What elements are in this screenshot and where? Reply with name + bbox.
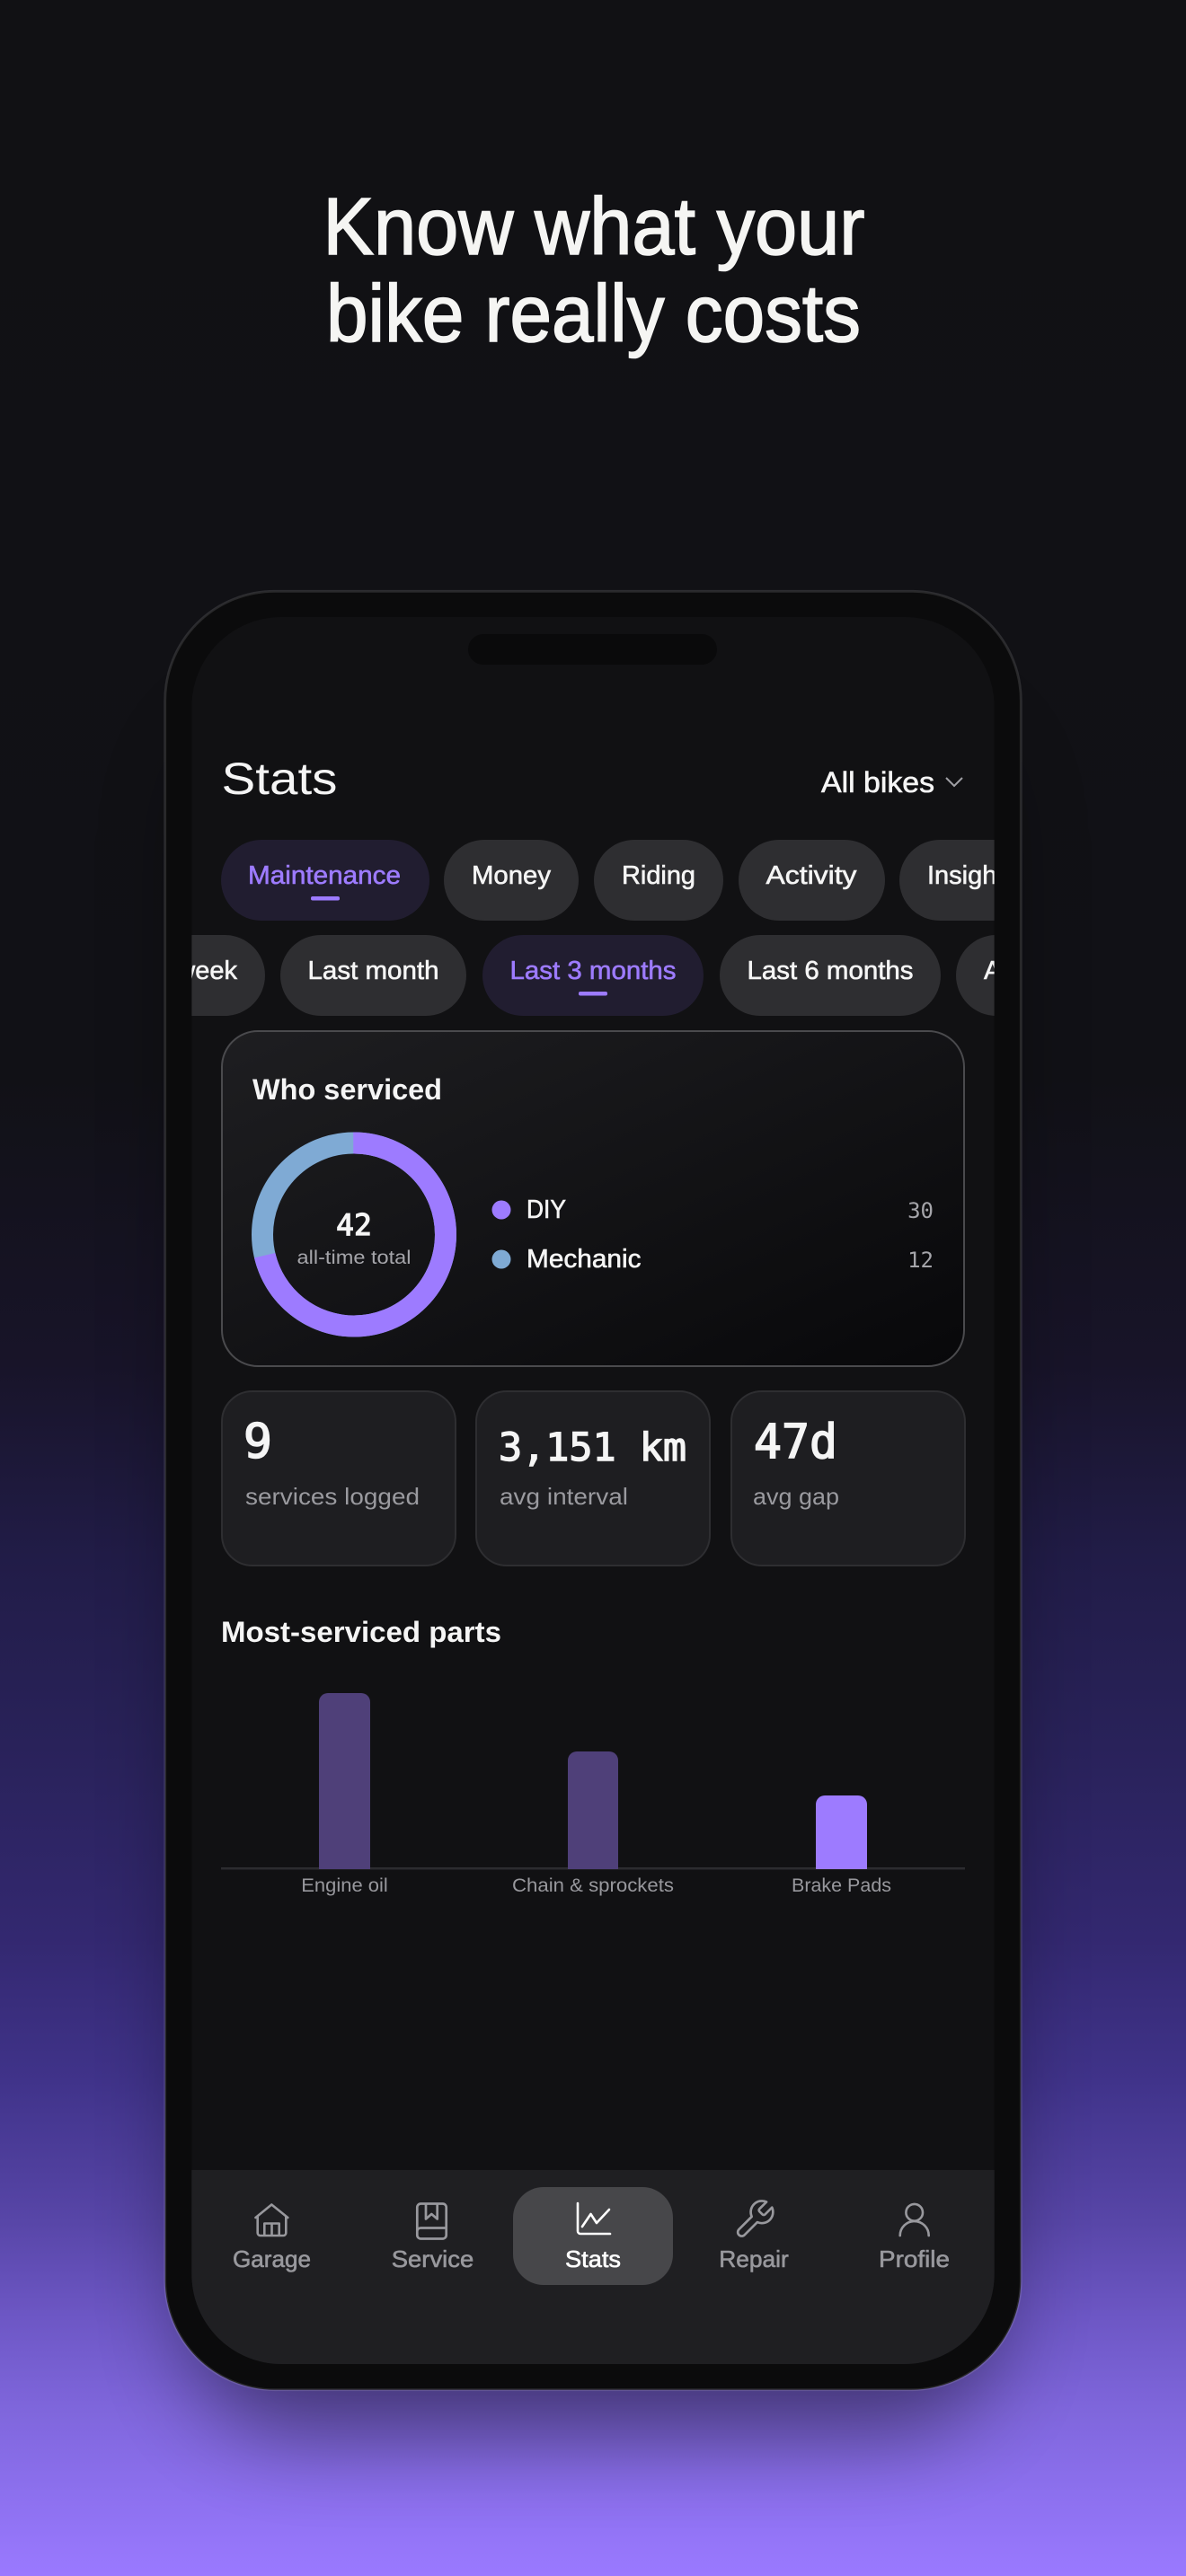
bar chart [221, 1693, 965, 1896]
category pills: Activity [766, 861, 857, 890]
stat card: avg interval: 3,151 km [499, 1425, 686, 1470]
category pills: Money [472, 861, 552, 890]
period pills: Last month [307, 957, 438, 985]
stat card: avg gap [731, 1391, 965, 1566]
card heading: Who serviced [252, 1073, 442, 1106]
nav: profile [879, 2204, 950, 2272]
period pills: Last 3 months [510, 957, 676, 985]
stat card: services logged: 9 [243, 1415, 272, 1469]
stat card: services logged: services logged [245, 1483, 420, 1510]
bar: chain and sprockets [512, 1751, 674, 1896]
bike selector: All bikes [821, 766, 934, 798]
page title: Stats [221, 754, 338, 804]
icon: chevron down [946, 778, 962, 786]
bar: engine oil [301, 1693, 388, 1896]
period pills: Last 6 months [748, 957, 913, 985]
filter pills [191, 840, 995, 1016]
stat card: services logged [222, 1391, 456, 1566]
bike selector [821, 771, 963, 792]
phone shadow [189, 719, 997, 2434]
period pills: All time [984, 957, 1069, 985]
headline: Know what your [323, 182, 864, 272]
legend: DIY [527, 1195, 566, 1224]
headline [323, 182, 864, 359]
icon: book [417, 2204, 447, 2238]
category pills: Riding [622, 861, 695, 890]
legend: 12 [907, 1248, 934, 1273]
legend: Mechanic [527, 1245, 642, 1274]
category pills: Insights [927, 861, 1017, 890]
nav: garage: Garage [233, 2245, 311, 2272]
donut chart: 42 [336, 1207, 372, 1242]
bar: engine oil: Engine oil [301, 1875, 388, 1896]
stat card: avg interval: avg interval [500, 1483, 628, 1510]
period pills [191, 935, 995, 1016]
nav: repair [719, 2201, 789, 2272]
icon: person [900, 2204, 929, 2236]
bar: brake pads: Brake Pads [792, 1875, 891, 1896]
category pills: Maintenance [248, 861, 401, 890]
icon: line chart [578, 2203, 610, 2234]
nav: garage [233, 2204, 311, 2272]
legend [492, 1200, 933, 1268]
phone frame [165, 591, 1021, 2390]
bar: brake pads [792, 1795, 891, 1896]
nav: service [392, 2204, 474, 2272]
donut chart: all-time total [296, 1248, 412, 1268]
headline: bike really costs [326, 269, 861, 359]
screen [191, 763, 995, 2364]
category pills [221, 840, 1061, 921]
stat card: avg gap: avg gap [753, 1483, 839, 1510]
donut chart [262, 1142, 446, 1326]
stat card: avg interval [476, 1391, 710, 1566]
nav: stats: Stats [565, 2245, 621, 2272]
panel: who serviced [222, 1031, 964, 1366]
notch [468, 634, 717, 665]
period pills: Last week [119, 957, 237, 985]
nav: repair: Repair [719, 2245, 789, 2272]
icon: wrench [738, 2201, 773, 2236]
section heading: most-serviced parts: Most-serviced parts [221, 1616, 501, 1648]
stat card: avg gap: 47d [754, 1415, 837, 1469]
icon: house [255, 2204, 288, 2236]
bottom navigation [191, 2170, 995, 2364]
nav: stats [565, 2203, 621, 2272]
nav: service: Service [392, 2245, 474, 2272]
nav: profile: Profile [879, 2245, 950, 2272]
bar: chain and sprockets: Chain & sprockets [512, 1875, 674, 1896]
phone mockup [164, 590, 1022, 2391]
active tab highlight [513, 2187, 673, 2285]
legend: 30 [907, 1198, 934, 1223]
